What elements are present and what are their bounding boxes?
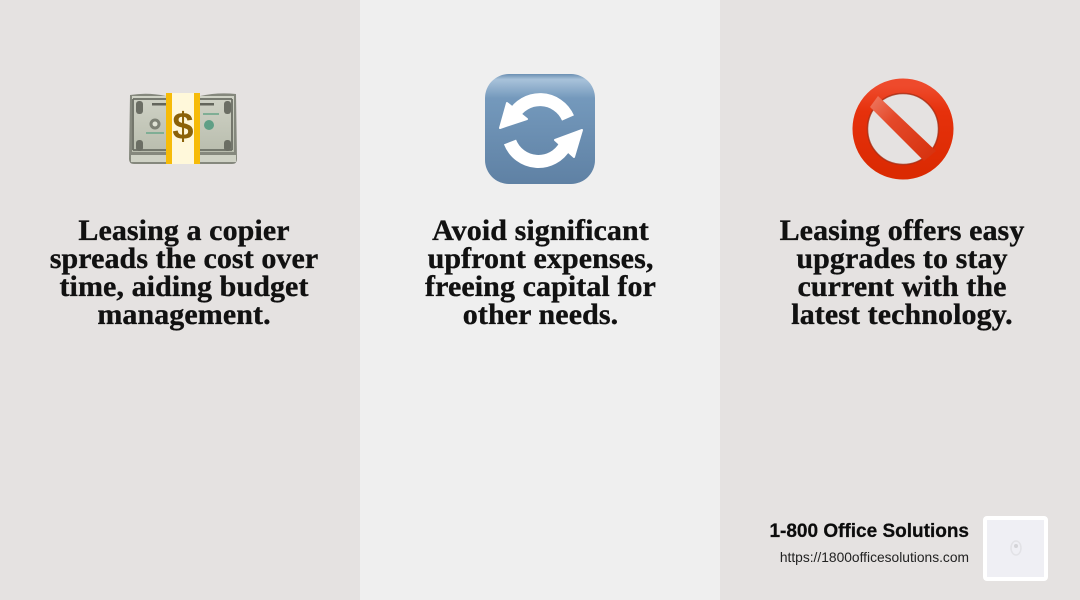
icon: banknotes with dollar band: [129, 93, 237, 164]
icon: banknotes with dollar band: $: [172, 106, 194, 148]
heading: avoid upfront expenses: Avoid significant: [432, 214, 649, 247]
footer: company name: 1-800 Office Solutions: [769, 521, 969, 542]
footer: logo tile: [983, 516, 1048, 581]
icon: blue refresh arrows: [485, 74, 595, 184]
panel: avoid upfront expenses: [360, 0, 720, 600]
heading: easy upgrades: upgrades to stay: [796, 242, 1008, 275]
icon: red prohibited sign: [852, 78, 954, 180]
icon: faint logo mark: [1010, 540, 1022, 556]
heading: avoid upfront expenses: freeing capital for: [425, 270, 656, 303]
heading: easy upgrades: Leasing offers easy: [780, 214, 1024, 247]
heading: cost spreading: [50, 214, 318, 331]
heading: cost spreading: management.: [97, 298, 271, 331]
heading: easy upgrades: latest technology.: [791, 298, 1013, 331]
panel: easy upgrades: [720, 0, 1080, 600]
heading: cost spreading: Leasing a copier: [78, 214, 290, 247]
heading: cost spreading: time, aiding budget: [59, 270, 309, 303]
heading: avoid upfront expenses: upfront expenses,: [428, 242, 653, 275]
heading: avoid upfront expenses: other needs.: [463, 298, 618, 331]
footer: website url: https://1800officesolutions.com: [780, 550, 969, 565]
heading: avoid upfront expenses: [425, 214, 656, 331]
heading: easy upgrades: current with the: [797, 270, 1007, 303]
heading: cost spreading: spreads the cost over: [50, 242, 318, 275]
heading: easy upgrades: [780, 214, 1024, 331]
panel: cost spreading: [0, 0, 360, 600]
